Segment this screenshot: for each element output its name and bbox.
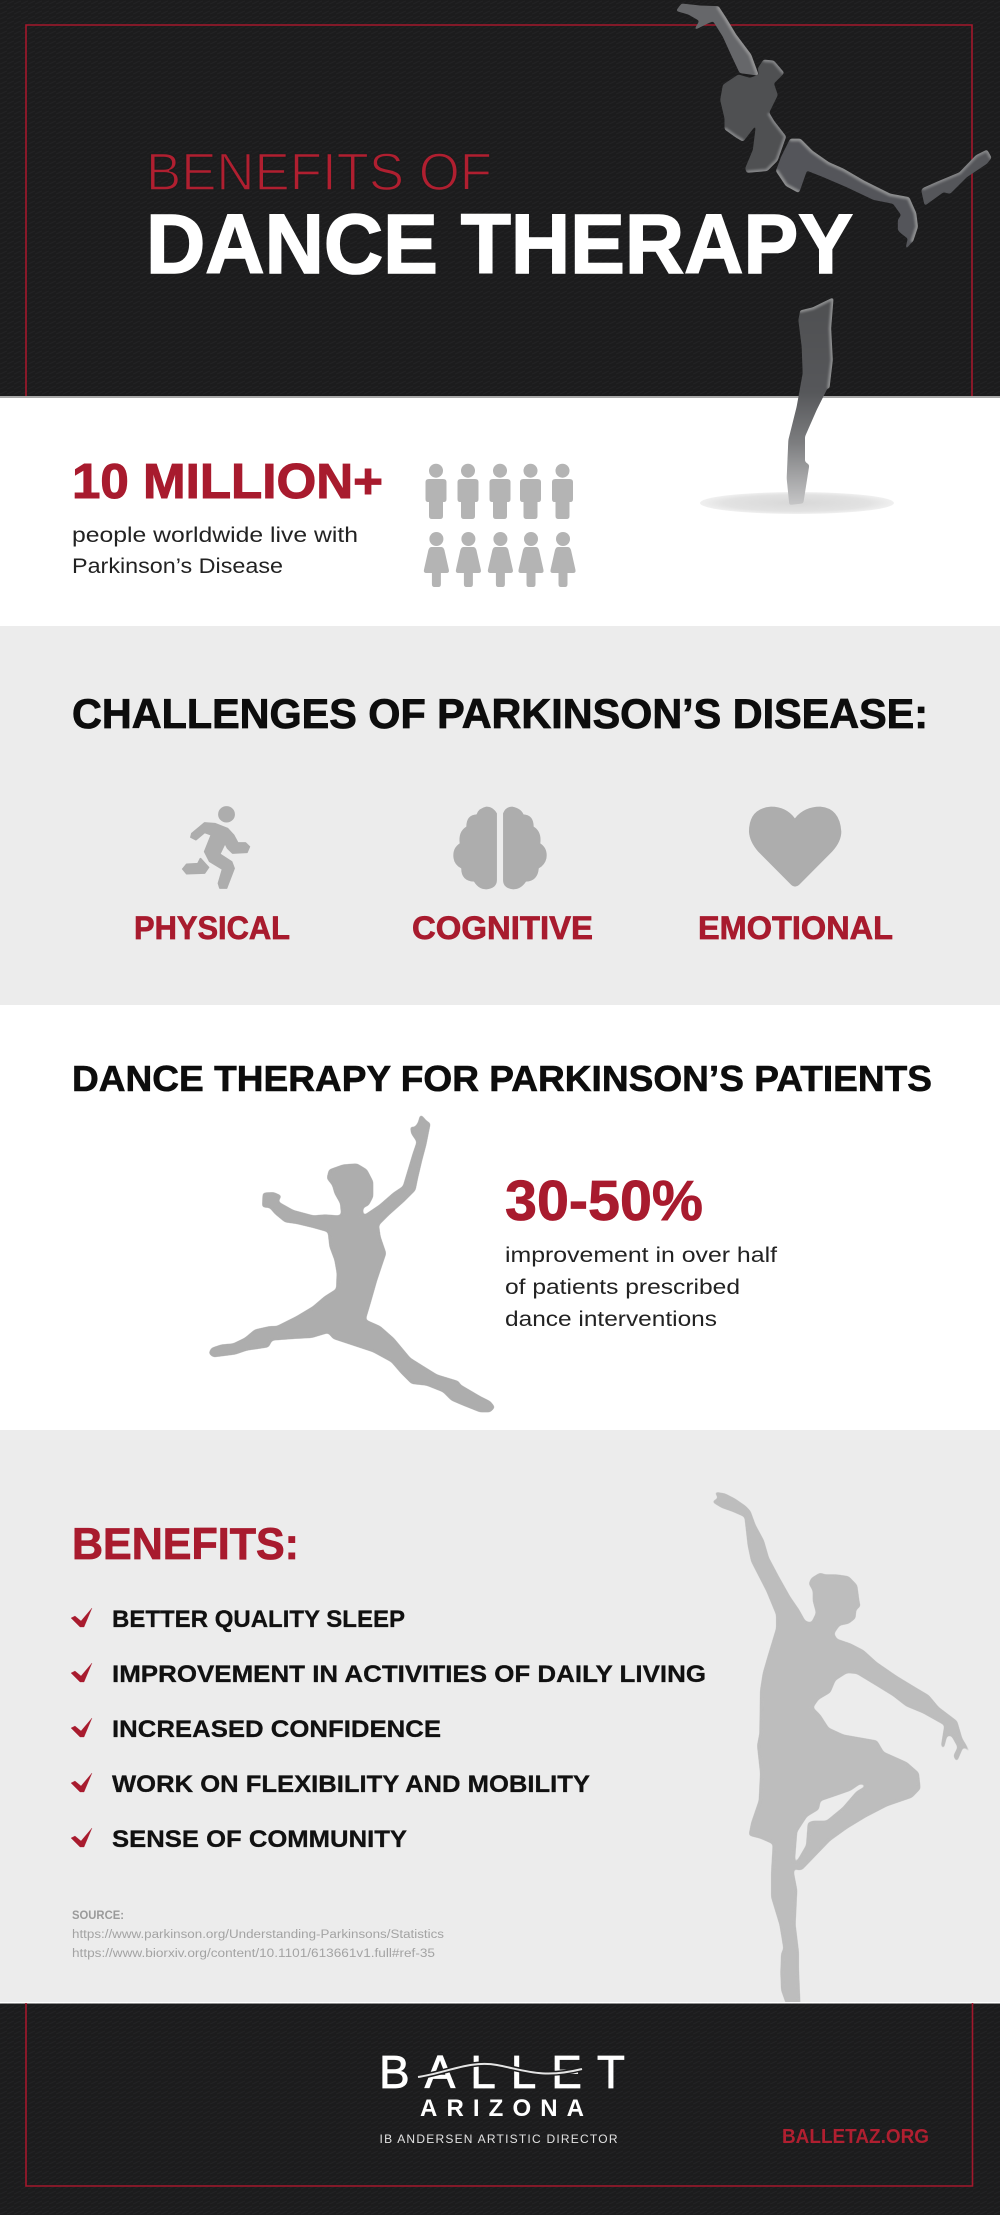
heading: benefits: BENEFITS: <box>72 1520 299 1569</box>
statistic: 10 million: 10 MILLION+ <box>72 455 383 509</box>
standing leg <box>787 299 832 505</box>
list: benefits <box>71 1606 706 1853</box>
logo: ballet arizona: ARIZONA <box>420 2095 584 2122</box>
title: dance therapy: DANCE THERAPY <box>146 197 853 291</box>
panel: benefits <box>0 1430 1000 2009</box>
benefit: community: SENSE OF COMMUNITY <box>112 1826 407 1853</box>
artistic director credit: IB ANDERSEN ARTISTIC DIRECTOR <box>380 2132 618 2146</box>
benefit: sleep: BETTER QUALITY SLEEP <box>112 1606 405 1633</box>
benefit: flexibility: WORK ON FLEXIBILITY AND MOBILITY <box>112 1771 590 1798</box>
icon: brain <box>453 807 547 889</box>
source list <box>72 1908 444 1960</box>
statistic description <box>505 1243 777 1331</box>
label: emotional: EMOTIONAL <box>698 910 893 946</box>
floor shadow under ballerina <box>700 492 894 514</box>
raised foot <box>922 151 991 205</box>
benefit: daily living: IMPROVEMENT IN ACTIVITIES OF DAILY LIVING <box>112 1661 706 1688</box>
icon: ten people <box>424 464 576 587</box>
statistic description <box>72 523 358 578</box>
logo: ballet arizona <box>379 2046 625 2122</box>
title: benefits of: BENEFITS OF <box>146 143 492 202</box>
statistic description: of patients prescribed <box>505 1275 740 1299</box>
heading: challenges: CHALLENGES OF PARKINSON’S DISEASE: <box>72 690 928 737</box>
illustration: leaping dancer <box>209 1115 494 1412</box>
website: BALLETAZ.ORG <box>782 2126 929 2148</box>
icon: runner <box>183 807 249 888</box>
statistic description: people worldwide live with <box>72 523 358 547</box>
statistic: 30-50%: 30-50% <box>505 1169 703 1233</box>
source list: https://www.parkinson.org/Understanding-Parkinsons/Statistics <box>72 1929 444 1941</box>
statistic description: dance interventions <box>505 1307 717 1331</box>
statistic description: Parkinson’s Disease <box>72 554 283 578</box>
illustration: standing dancer <box>713 1492 970 2009</box>
icon: heart <box>749 807 841 887</box>
source list: https://www.biorxiv.org/content/10.1101/613661v1.full#ref-35 <box>72 1948 435 1960</box>
panel: footer <box>0 2002 1000 2215</box>
panel: challenges <box>0 626 1000 1005</box>
extended arm <box>777 140 917 248</box>
logo: ballet arizona: BALLET <box>379 2046 625 2098</box>
statistic description: improvement in over half <box>505 1243 777 1267</box>
heading: dance therapy for patients: DANCE THERAPY FOR PARKINSON’S PATIENTS <box>72 1058 932 1099</box>
panel: header <box>0 0 1000 398</box>
benefit: confidence: INCREASED CONFIDENCE <box>112 1716 441 1743</box>
illustration: ballerina spanning header <box>677 4 991 505</box>
panel: 10 million statistic <box>0 398 1000 626</box>
label: cognitive: COGNITIVE <box>412 910 593 946</box>
label: physical: PHYSICAL <box>134 910 290 946</box>
head and torso <box>721 61 785 172</box>
source list: SOURCE: <box>72 1908 124 1922</box>
panel: dance therapy <box>0 1005 1000 1430</box>
raised arm <box>677 4 757 75</box>
